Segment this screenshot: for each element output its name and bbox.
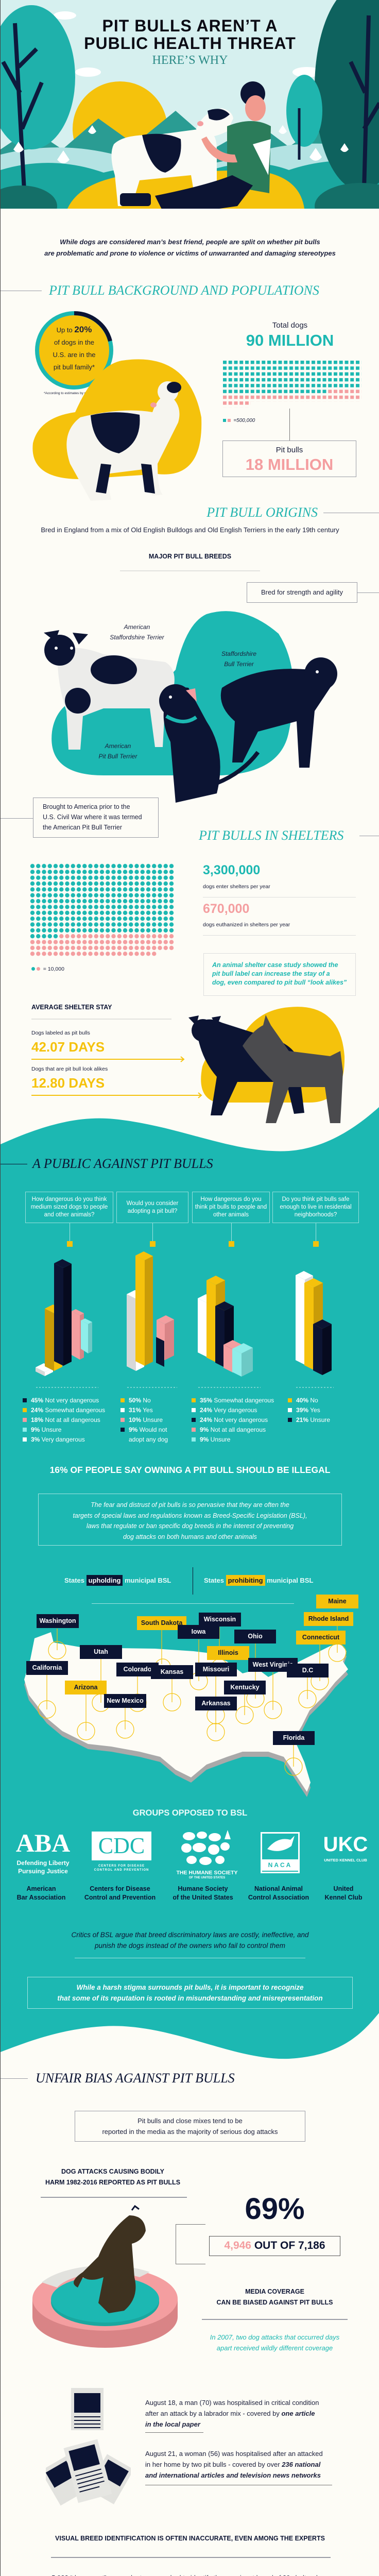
icon: many newspapers	[46, 2438, 131, 2511]
survey questions: How dangerous do you think pit bulls to people and other animals	[195, 1196, 267, 1218]
group names: of the United States	[173, 1894, 233, 1901]
box: pit bulls 18 million: Pit bulls	[276, 446, 303, 454]
map state labels: Arizona	[74, 1684, 97, 1691]
section heading: origins: PIT BULL ORIGINS	[206, 505, 318, 520]
stat: 3,300,000: 3,300,000	[203, 863, 260, 877]
label: Staffordshire Bull Terrier	[221, 650, 256, 668]
map legend: States upholding municipal BSL	[64, 1577, 171, 1584]
origins text: Bred in England from a mix of Old English Bulldogs and Old English Terriers in the early 19th century	[41, 526, 339, 534]
heading: attacks reported: HARM 1982-2016 REPORTED AS PIT BULLS	[45, 2179, 180, 2186]
map state labels: Washington	[39, 1617, 76, 1624]
heading: attacks reported	[45, 2168, 180, 2186]
BSL explanation box: laws that regulate or ban specific dog breeds in the interest of preventing	[87, 1522, 294, 1530]
teal note 2007: apart received wildly different coverage	[217, 2344, 333, 2352]
map state labels: Colorado	[124, 1666, 151, 1673]
stat: 670,000: dogs euthanized in shelters per year	[203, 922, 290, 928]
map state labels: D.C	[302, 1667, 313, 1674]
stat: 3,300,000: dogs enter shelters per year	[203, 884, 270, 890]
map state labels: Utah	[94, 1648, 108, 1655]
circle stat 20%	[35, 311, 113, 389]
text: 21% Unsure	[296, 1416, 330, 1423]
group names: Bar Association	[17, 1894, 65, 1901]
text: 9% Unsure	[200, 1436, 230, 1443]
section heading: background: PIT BULL BACKGROUND AND POPULATIONS	[49, 283, 319, 298]
average shelter stay: Dogs labeled as pit bulls	[31, 1030, 90, 1036]
title: PUBLIC HEALTH THREAT	[84, 34, 296, 53]
heading: attacks reported: DOG ATTACKS CAUSING BODILY	[61, 2168, 164, 2175]
map state labels: Florida	[283, 1734, 304, 1741]
label: Staffordshire Bull Terrier: Bull Terrier	[224, 660, 254, 668]
box: media reports: Pit bulls and close mixes tend to be	[137, 2117, 243, 2125]
circle stat 20%: Up to 20%	[57, 325, 92, 334]
text: August 18: after an attack by a labrador mix - covered by one article	[145, 2410, 315, 2417]
callout: case study: pit bull label can increase the stay of a	[212, 970, 330, 977]
map state labels: West Virginia	[253, 1661, 293, 1668]
callout: case study: dog, even compared to pit bull “look alikes”	[212, 979, 347, 986]
box: brought to America	[33, 798, 159, 838]
heading: visual breed identification: VISUAL BREED IDENTIFICATION IS OFTEN INACCURATE, EVEN AMONG THE EXPERTS	[55, 2535, 325, 2542]
text: 24% Not very dangerous	[200, 1416, 268, 1423]
legend: squares: =500,000	[233, 418, 255, 423]
section heading: shelters: PIT BULLS IN SHELTERS	[199, 828, 343, 843]
survey questions: Do you think pit bulls safe enough to live in residential neighborhoods?	[280, 1196, 352, 1218]
label: American Staffordshire Terrier	[110, 623, 165, 641]
text: 31% Yes	[129, 1406, 153, 1414]
stat: 670,000: 670,000	[203, 902, 249, 916]
label: Staffordshire Bull Terrier: Staffordshire	[221, 650, 256, 657]
text: August 21: August 21, a woman (56) was hospitalised after an attacked	[145, 2450, 323, 2458]
box: bred for strength	[247, 582, 357, 603]
map state labels: Kentucky	[230, 1684, 260, 1691]
legends: 9% Unsure	[31, 1426, 61, 1433]
intro text: While dogs are considered man’s best friend, people are split on whether pit bulls	[60, 238, 320, 246]
average shelter stay: 42.07 DAYS	[31, 1039, 105, 1055]
text: 39% Yes	[296, 1406, 320, 1414]
map state labels: Arkansas	[201, 1700, 231, 1707]
map state labels: Maine	[328, 1598, 347, 1605]
average shelter stay: AVERAGE SHELTER STAY	[31, 1004, 112, 1011]
text: August 18: August 18, a man (70) was hospitalised in critical condition	[145, 2399, 319, 2406]
teal note 2007: In 2007, two dog attacks that occurred days	[210, 2333, 339, 2341]
heading: media coverage: CAN BE BIASED AGAINST PIT BULLS	[217, 2299, 333, 2306]
box: 4,946 out of 7,186: 4,946 OUT OF 7,186	[224, 2240, 325, 2251]
stat: 3,300,000	[203, 863, 270, 890]
logo: UKC: UNITED KENNEL CLUB	[324, 1858, 367, 1862]
box: brought to America: Brought to America prior to the	[43, 803, 130, 810]
isometric bar charts	[36, 1251, 334, 1388]
logo: CDC: CDC	[98, 1833, 145, 1858]
logo: ABA	[16, 1828, 70, 1875]
BSL explanation box: targets of special laws and regulations known as Breed-Specific Legislation (BSL),	[73, 1512, 307, 1519]
box: pit bulls 18 million	[222, 440, 356, 477]
text: 10% Unsure	[129, 1416, 163, 1423]
group names: Kennel Club	[325, 1894, 362, 1901]
box: pit bulls 18 million: 18 MILLION	[246, 455, 333, 473]
text: 50% No	[129, 1397, 151, 1404]
legends	[23, 1397, 105, 1443]
stat: total dogs: Total dogs	[272, 321, 307, 330]
legends: 18% Not at all dangerous	[31, 1416, 100, 1423]
logo: UKC: UKC	[323, 1833, 368, 1856]
map state labels: Ohio	[248, 1633, 263, 1640]
box: media reports: reported in the media as the majority of serious dog attacks	[102, 2128, 278, 2136]
group names: United	[334, 1885, 353, 1892]
callout: case study	[203, 953, 356, 996]
critics text	[72, 1931, 309, 1950]
map state labels: Missouri	[203, 1666, 229, 1673]
BSL explanation box: dog attacks on both humans and other animals	[123, 1533, 257, 1540]
subheading: major breeds: MAJOR PIT BULL BREEDS	[149, 553, 231, 560]
map state labels	[26, 1595, 358, 1745]
average shelter stay	[31, 1004, 202, 1098]
teal note 2007	[202, 2332, 348, 2353]
text: 35% Somewhat dangerous	[200, 1397, 274, 1404]
text: August 18: in the local paper	[145, 2420, 200, 2428]
heading: media coverage	[217, 2288, 333, 2306]
label: American Staffordshire Terrier: Staffordshire Terrier	[110, 634, 164, 641]
label: American Pit Bull Terrier: Pit Bull Terrier	[99, 753, 137, 760]
logo: Humane Society: THE HUMANE SOCIETY	[176, 1870, 238, 1876]
section heading: unfair bias: UNFAIR BIAS AGAINST PIT BULLS	[36, 2071, 235, 2086]
logo: CDC: CONTROL AND PREVENTION	[94, 1869, 149, 1872]
icon: single newspaper	[71, 2388, 104, 2430]
stat: total dogs: 90 MILLION	[246, 331, 334, 349]
label: American Staffordshire Terrier: American	[124, 623, 150, 631]
logo: ABA: ABA	[16, 1828, 70, 1857]
average shelter stay: Dogs that are pit bull look alikes	[31, 1066, 108, 1072]
logo: CDC: CENTERS FOR DISEASE	[98, 1865, 145, 1868]
text: August 18	[145, 2397, 341, 2430]
section heading: public: A PUBLIC AGAINST PIT BULLS	[32, 1156, 213, 1171]
survey questions: How dangerous do you think medium sized dogs to people and other animals?	[31, 1196, 108, 1218]
intro text: are problematic and prone to violence or victims of unwarranted and damaging stereotypes	[44, 249, 336, 257]
text: August 21: in her home by two pit bulls - covered by over 236 national	[145, 2461, 320, 2468]
map legend	[64, 1567, 313, 1604]
box: media reports	[75, 2111, 305, 2142]
text: 9% Not at all dangerous	[200, 1426, 266, 1433]
text: 40% No	[296, 1397, 318, 1404]
text: August 21	[145, 2448, 351, 2481]
illustration: two dogs on yellow blob	[188, 1007, 345, 1123]
intro text	[44, 238, 336, 257]
illustration: dog on yellow blob	[32, 359, 202, 494]
callout: case study: An animal shelter case study showed the	[212, 961, 338, 969]
box: brought to America: the American Pit Bull Terrier	[43, 824, 122, 831]
map state labels: Connecticut	[302, 1634, 339, 1641]
circle stat 20%: U.S. are in the	[53, 351, 96, 359]
map state labels: Kansas	[161, 1668, 183, 1675]
heading: groups opposed: GROUPS OPPOSED TO BSL	[133, 1808, 247, 1818]
text: August 21: and international articles and television news networks	[145, 2471, 321, 2479]
title: PIT BULLS AREN’T A	[102, 16, 278, 35]
label: American Pit Bull Terrier	[99, 742, 137, 760]
legends: 3% Very dangerous	[31, 1436, 85, 1443]
legend: squares	[223, 418, 255, 423]
illustration: three breeds	[44, 611, 337, 803]
headline 16%: 16% OF PEOPLE SAY OWNING A PIT BULL SHOULD BE ILLEGAL	[50, 1465, 330, 1475]
legends: 24% Somewhat dangerous	[31, 1406, 105, 1414]
logo: CDC	[92, 1832, 151, 1872]
map state labels: South Dakota	[141, 1619, 182, 1626]
map state labels: Iowa	[192, 1628, 205, 1635]
logo: ABA: Pursuing Justice	[18, 1868, 68, 1875]
callout: stigma: While a harsh stigma surrounds pit bulls, it is important to recognize	[76, 1984, 304, 1991]
text: 24% Very dangerous	[200, 1406, 257, 1414]
survey questions: Would you consider adopting a pit bull?	[127, 1200, 178, 1214]
logo: Humane Society: OF THE UNITED STATES	[189, 1876, 225, 1879]
text: adopt any dog	[129, 1436, 168, 1443]
map state labels: Wisconsin	[204, 1616, 236, 1623]
stat: 69%: 69%	[245, 2192, 305, 2226]
US map	[24, 1626, 348, 1797]
hero illustration	[1, 0, 379, 209]
logo: Humane Society	[176, 1830, 238, 1879]
footnote: *According to estimates by pitbullinfo.org	[44, 392, 104, 395]
logo: NACA: NACA	[268, 1861, 292, 1869]
square grid chart	[223, 361, 361, 407]
circle stat 20%: of dogs in the	[54, 338, 94, 346]
title	[84, 16, 296, 53]
critics text: Critics of BSL argue that breed discriminatory laws are costly, ineffective, and	[72, 1931, 308, 1939]
subtitle: HERE’S WHY	[152, 54, 228, 67]
callout: stigma	[27, 1977, 353, 2009]
legends: 45% Not very dangerous	[31, 1397, 99, 1404]
group names: National Animal	[254, 1885, 303, 1892]
group names: Centers for Disease	[90, 1885, 150, 1892]
heading: media coverage: MEDIA COVERAGE	[245, 2288, 304, 2295]
box: bred for strength: Bred for strength and agility	[261, 588, 343, 596]
stat: total dogs	[246, 321, 334, 349]
survey questions	[25, 1192, 359, 1247]
group names: American	[27, 1885, 56, 1892]
box: 4,946 out of 7,186	[209, 2236, 340, 2256]
map state labels: New Mexico	[107, 1697, 144, 1704]
teal background band with waves	[1, 1107, 379, 2059]
group names: Control Association	[248, 1894, 309, 1901]
logo: ABA: Defending Liberty	[16, 1859, 69, 1867]
average shelter stay: 12.80 DAYS	[31, 1075, 105, 1091]
map state labels: California	[32, 1664, 62, 1671]
legend: dots: = 10,000	[43, 966, 64, 972]
stat: 670,000	[203, 902, 290, 928]
BSL explanation box: The fear and distrust of pit bulls is so pervasive that they are often the	[91, 1501, 289, 1509]
group names	[17, 1885, 362, 1901]
critics text: punish the dogs instead of the owners who fail to control them	[95, 1942, 285, 1950]
callout: stigma: that some of its reputation is rooted in misunderstanding and misrepresentation	[57, 1994, 323, 2002]
box: brought to America: U.S. Civil War where it was termed	[43, 814, 142, 821]
logos	[16, 1828, 368, 1879]
text: 9% Would not	[129, 1426, 167, 1433]
BSL explanation box	[38, 1494, 342, 1546]
map legend: States prohibiting municipal BSL	[204, 1577, 313, 1584]
group names: Humane Society	[178, 1885, 228, 1892]
legend: dots	[31, 966, 64, 972]
dot grid chart	[30, 863, 174, 956]
map state labels: Rhode Island	[308, 1615, 349, 1622]
label: American Pit Bull Terrier: American	[105, 742, 131, 750]
group names: Control and Prevention	[84, 1894, 156, 1901]
illustration: dog on donut platform	[32, 2205, 178, 2348]
logo: NACA	[261, 1832, 300, 1873]
map state labels: Illinois	[218, 1649, 238, 1656]
circle stat 20%: pit bull family*	[54, 363, 95, 371]
